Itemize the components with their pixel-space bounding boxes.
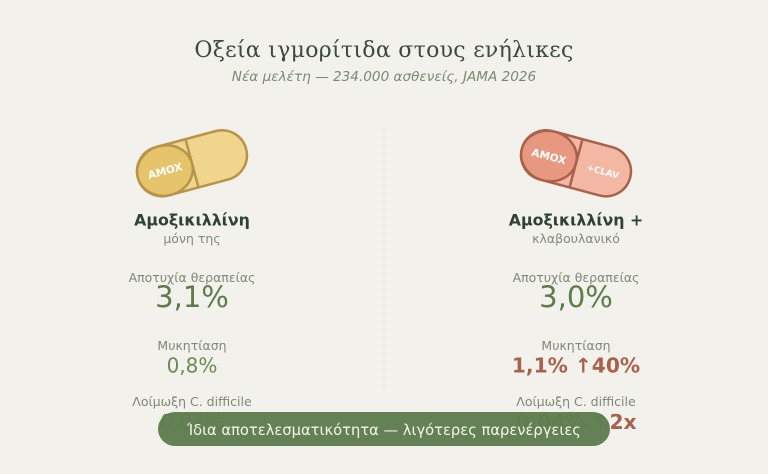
icon: amoxicillin-clavulanate capsule: [515, 125, 637, 202]
icon: amoxicillin-clavulanate capsule: +CLAV: [585, 163, 620, 182]
stat: candidiasis: Μυκητίαση: [541, 338, 611, 353]
stat: C. difficile infection: [515, 394, 637, 434]
stat: treatment failure: Αποτυχία θεραπείας: [513, 270, 639, 285]
drug name: Αμοξικιλλίνη +: [509, 210, 643, 230]
icon: amoxicillin-clavulanate capsule: AMOX: [530, 147, 567, 167]
stat: candidiasis: [157, 338, 227, 378]
stat: treatment failure: [513, 270, 639, 314]
stat: candidiasis: [512, 338, 640, 378]
stat: treatment failure: [129, 270, 255, 314]
stat: C. difficile infection: 0,04% ↑2x: [515, 410, 637, 434]
icon: amoxicillin capsule: AMOX: [147, 161, 184, 182]
drug descriptor: μόνη της: [163, 231, 221, 246]
stat: treatment failure: 3,1%: [155, 280, 229, 314]
title: Οξεία ιγμορίτιδα στους ενήλικες: [194, 38, 574, 63]
stat: treatment failure: 3,0%: [539, 280, 613, 314]
stat: candidiasis: 1,1% ↑40%: [512, 354, 640, 378]
stat: C. difficile infection: 0,02%: [160, 410, 224, 434]
subtitle: Νέα μελέτη — 234.000 ασθενείς, JAMA 2026: [232, 69, 537, 85]
drug descriptor: κλαβουλανικό: [532, 231, 620, 246]
drug name: Αμοξικιλλίνη: [134, 210, 250, 230]
stat: C. difficile infection: [132, 394, 252, 434]
panel: amoxicillin with clavulanate: [509, 125, 643, 434]
stat: candidiasis: 0,8%: [167, 354, 217, 378]
icon: amoxicillin capsule: [131, 125, 253, 202]
stat: C. difficile infection: Λοίμωξη C. difficile: [132, 394, 252, 409]
stat: candidiasis: Μυκητίαση: [157, 338, 227, 353]
stat: C. difficile infection: Λοίμωξη C. difficile: [516, 394, 636, 409]
callout: conclusion banner: [158, 412, 610, 446]
panel: amoxicillin alone: [129, 125, 255, 434]
callout: conclusion banner: Ίδια αποτελεσματικότητα — λιγότερες παρενέργειες: [186, 422, 581, 439]
stat: treatment failure: Αποτυχία θεραπείας: [129, 270, 255, 285]
